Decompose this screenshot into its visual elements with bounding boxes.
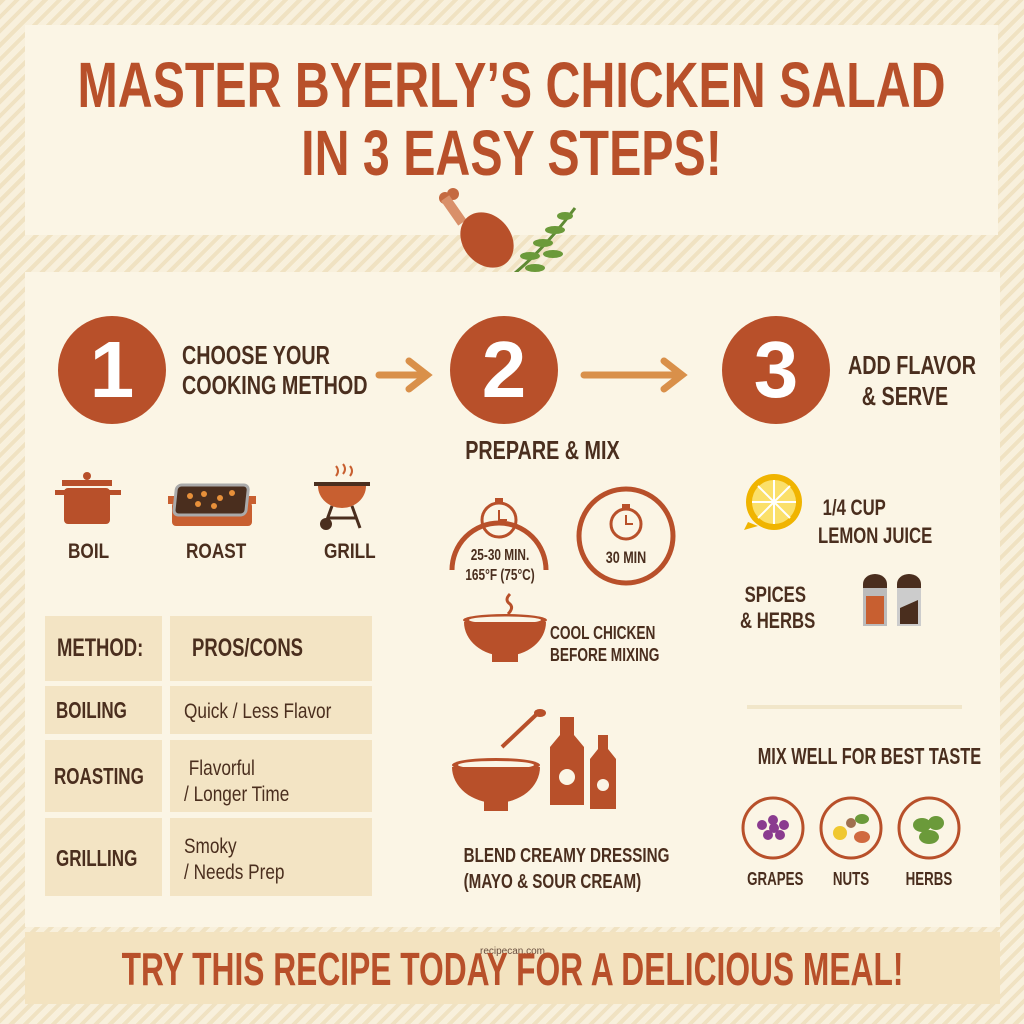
text: ROAST — [186, 540, 246, 563]
lemon juice text: 1/4 CUP — [823, 495, 886, 520]
icon: chicken leg and herb — [439, 188, 576, 272]
step 2 badge: 2 — [482, 325, 526, 414]
icon: roast pan — [168, 484, 256, 526]
icon: lemon — [744, 474, 802, 530]
icon: herbs — [898, 796, 960, 860]
title: MASTER BYERLY’S CHICKEN SALAD — [77, 49, 946, 121]
step 1 heading: COOKING METHOD — [182, 370, 368, 400]
icon: shakers — [863, 574, 921, 626]
step 3 heading: ADD FLAVOR — [848, 350, 976, 380]
spices text: & HERBS — [740, 608, 815, 633]
text: GRILLING — [56, 845, 137, 871]
step 2 badge — [450, 316, 558, 424]
lemon juice text — [818, 495, 932, 548]
step 3 badge: 3 — [754, 325, 798, 414]
footer band — [25, 932, 1000, 1004]
method labels — [68, 540, 376, 563]
timer 1 text: 25-30 MIN. — [471, 547, 529, 564]
icon: bowl steam — [463, 593, 547, 662]
step 1 heading — [182, 340, 368, 400]
text: METHOD: — [57, 634, 143, 662]
timer 1 text: 165°F (75°C) — [465, 567, 535, 584]
step 3 heading: & SERVE — [862, 381, 948, 411]
spices text: SPICES — [745, 582, 806, 607]
step 3 badge — [722, 316, 830, 424]
step 1 badge: 1 — [90, 325, 134, 414]
text: / Needs Prep — [184, 861, 285, 884]
ingredient circles — [742, 796, 960, 889]
text: BOILING — [56, 697, 127, 723]
ingredient circles: NUTS — [833, 869, 869, 889]
ingredient circles: HERBS — [906, 869, 952, 889]
text: PROS/CONS — [192, 634, 303, 662]
icon: grapes — [742, 796, 804, 860]
main panel — [25, 272, 1000, 927]
step 1 badge — [58, 316, 166, 424]
title — [77, 49, 946, 189]
footer text: TRY THIS RECIPE TODAY FOR A DELICIOUS MEAL! — [122, 943, 903, 995]
text: Quick / Less Flavor — [184, 700, 331, 723]
icon: nuts — [820, 796, 882, 860]
title: IN 3 EASY STEPS! — [301, 117, 722, 189]
mix well text: MIX WELL FOR BEST TASTE — [758, 743, 981, 769]
title panel — [25, 25, 998, 235]
icon: pot — [55, 472, 121, 524]
cool chicken text: BEFORE MIXING — [550, 645, 659, 665]
text: GRILL — [324, 540, 376, 563]
timer 2 — [576, 486, 676, 586]
watermark: recipecan.com — [480, 946, 545, 957]
blend dressing text: (MAYO & SOUR CREAM) — [464, 871, 641, 893]
text: Smoky — [184, 835, 237, 858]
text: BOIL — [68, 540, 109, 563]
text: ROASTING — [54, 763, 144, 789]
divider — [747, 705, 962, 709]
icon: bowl and dressing bottles — [452, 709, 616, 811]
spices text — [740, 582, 815, 633]
step 1 heading: CHOOSE YOUR — [182, 340, 330, 370]
blend dressing text: BLEND CREAMY DRESSING — [464, 845, 669, 867]
text: Flavorful — [189, 757, 255, 780]
timer 1 text — [465, 547, 535, 584]
blend dressing text — [464, 845, 669, 893]
text: / Longer Time — [184, 783, 289, 806]
cool chicken text — [550, 623, 659, 665]
step 2 heading: PREPARE & MIX — [465, 435, 620, 465]
step 3 heading — [848, 350, 976, 411]
icon: grill — [314, 463, 370, 530]
arrow 1 — [376, 358, 433, 392]
arrow 2 — [580, 358, 688, 392]
lemon juice text: LEMON JUICE — [818, 523, 932, 548]
table: method pros/cons — [45, 616, 372, 896]
ingredient circles: GRAPES — [747, 869, 803, 889]
cool chicken text: COOL CHICKEN — [550, 623, 655, 643]
text: 30 MIN — [606, 548, 646, 567]
timer 1 — [450, 498, 548, 570]
